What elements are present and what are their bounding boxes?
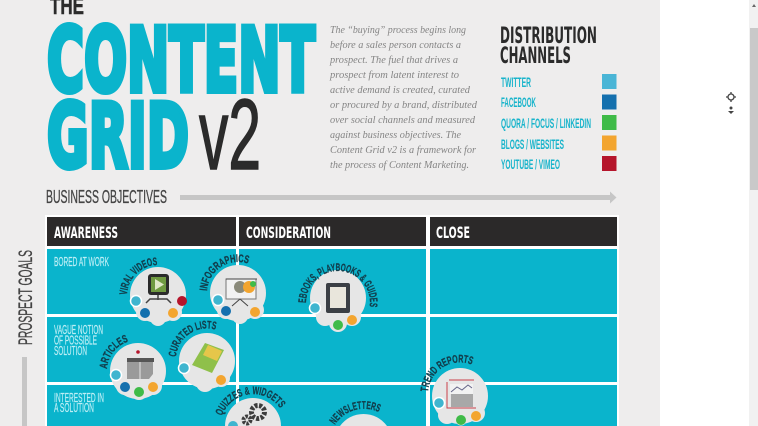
row labels: VAGUE NOTION xyxy=(54,322,103,337)
distribution channels legend xyxy=(500,24,616,172)
grid cells xyxy=(47,249,617,426)
row labels: BORED AT WORK xyxy=(54,254,109,269)
bubble: curated lists: CURATED LISTS xyxy=(168,320,216,356)
title: CONTENT xyxy=(47,9,315,112)
bubble: viral videos xyxy=(119,257,187,326)
row labels: OF POSSIBLE xyxy=(54,332,97,348)
title: v2 xyxy=(199,79,261,191)
row labels: INTERESTED IN xyxy=(54,390,104,405)
content grid xyxy=(45,215,619,426)
intro text block: against business objectives. The xyxy=(330,130,461,141)
distribution channels legend: DISTRIBUTION xyxy=(500,24,597,49)
distribution channels legend: CHANNELS xyxy=(500,44,571,69)
bubble: newsletters: NEWSLETTERS xyxy=(328,401,381,425)
bubble: curated lists xyxy=(168,320,235,392)
intro text block: active demand is created, curated xyxy=(330,85,471,96)
bubble: infographics: INFOGRAPHICS xyxy=(199,254,250,291)
bubble: trend reports: TREND REPORTS xyxy=(420,354,474,392)
intro text block: the process of Content Marketing. xyxy=(330,160,469,171)
distribution channels legend: FACEBOOK xyxy=(501,94,536,110)
bubble: articles xyxy=(100,334,166,400)
column headers: CLOSE xyxy=(436,223,470,242)
intro text block: before a sales person contacts a xyxy=(330,40,461,51)
intro text block: prospect from latent interest to xyxy=(329,70,459,81)
column headers: AWARENESS xyxy=(54,223,118,242)
intro text block xyxy=(329,25,478,171)
row labels: A SOLUTION xyxy=(54,400,94,415)
prospect goals axis label xyxy=(16,250,37,426)
row labels xyxy=(54,254,109,415)
intro text block: prospect. The fuel that drives a xyxy=(329,55,458,66)
bubble: quizzes and widgets: QUIZZES & WIDGETS xyxy=(216,386,286,415)
browser scrollbar xyxy=(749,0,758,426)
bubble: infographics xyxy=(199,254,266,324)
intro text block: Content Grid v2 is a framework for xyxy=(330,145,477,156)
cursor icons xyxy=(726,92,736,114)
distribution channels legend: TWITTER xyxy=(501,74,531,90)
distribution channels legend: QUORA / FOCUS / LINKEDIN xyxy=(501,115,591,131)
column headers: CONSIDERATION xyxy=(246,223,331,242)
intro text block: The “buying” process begins long xyxy=(330,25,466,36)
distribution channels legend: BLOGS / WEBSITES xyxy=(501,136,564,152)
bubble: articles: ARTICLES xyxy=(100,334,128,369)
distribution channels legend: YOUTUBE / VIMEO xyxy=(501,156,560,172)
bubble: ebooks, playbooks and guides: EBOOKS, PLAYBOOKS & GUIDES xyxy=(298,263,378,308)
business objectives heading with arrow xyxy=(46,186,616,207)
business objectives heading with arrow: BUSINESS OBJECTIVES xyxy=(46,186,167,207)
prospect goals axis label: PROSPECT GOALS xyxy=(16,250,37,345)
row labels: SOLUTION xyxy=(54,343,87,358)
intro text block: or procured by a brand, distributed xyxy=(330,100,478,111)
column headers xyxy=(47,217,617,246)
bubble: viral videos: VIRAL VIDEOS xyxy=(119,257,158,294)
title: GRID xyxy=(47,85,189,188)
title xyxy=(47,0,315,191)
bubble: trend reports xyxy=(420,354,488,426)
intro text block: over social channels and measured xyxy=(330,115,476,126)
bubble: ebooks, playbooks and guides xyxy=(298,263,378,332)
